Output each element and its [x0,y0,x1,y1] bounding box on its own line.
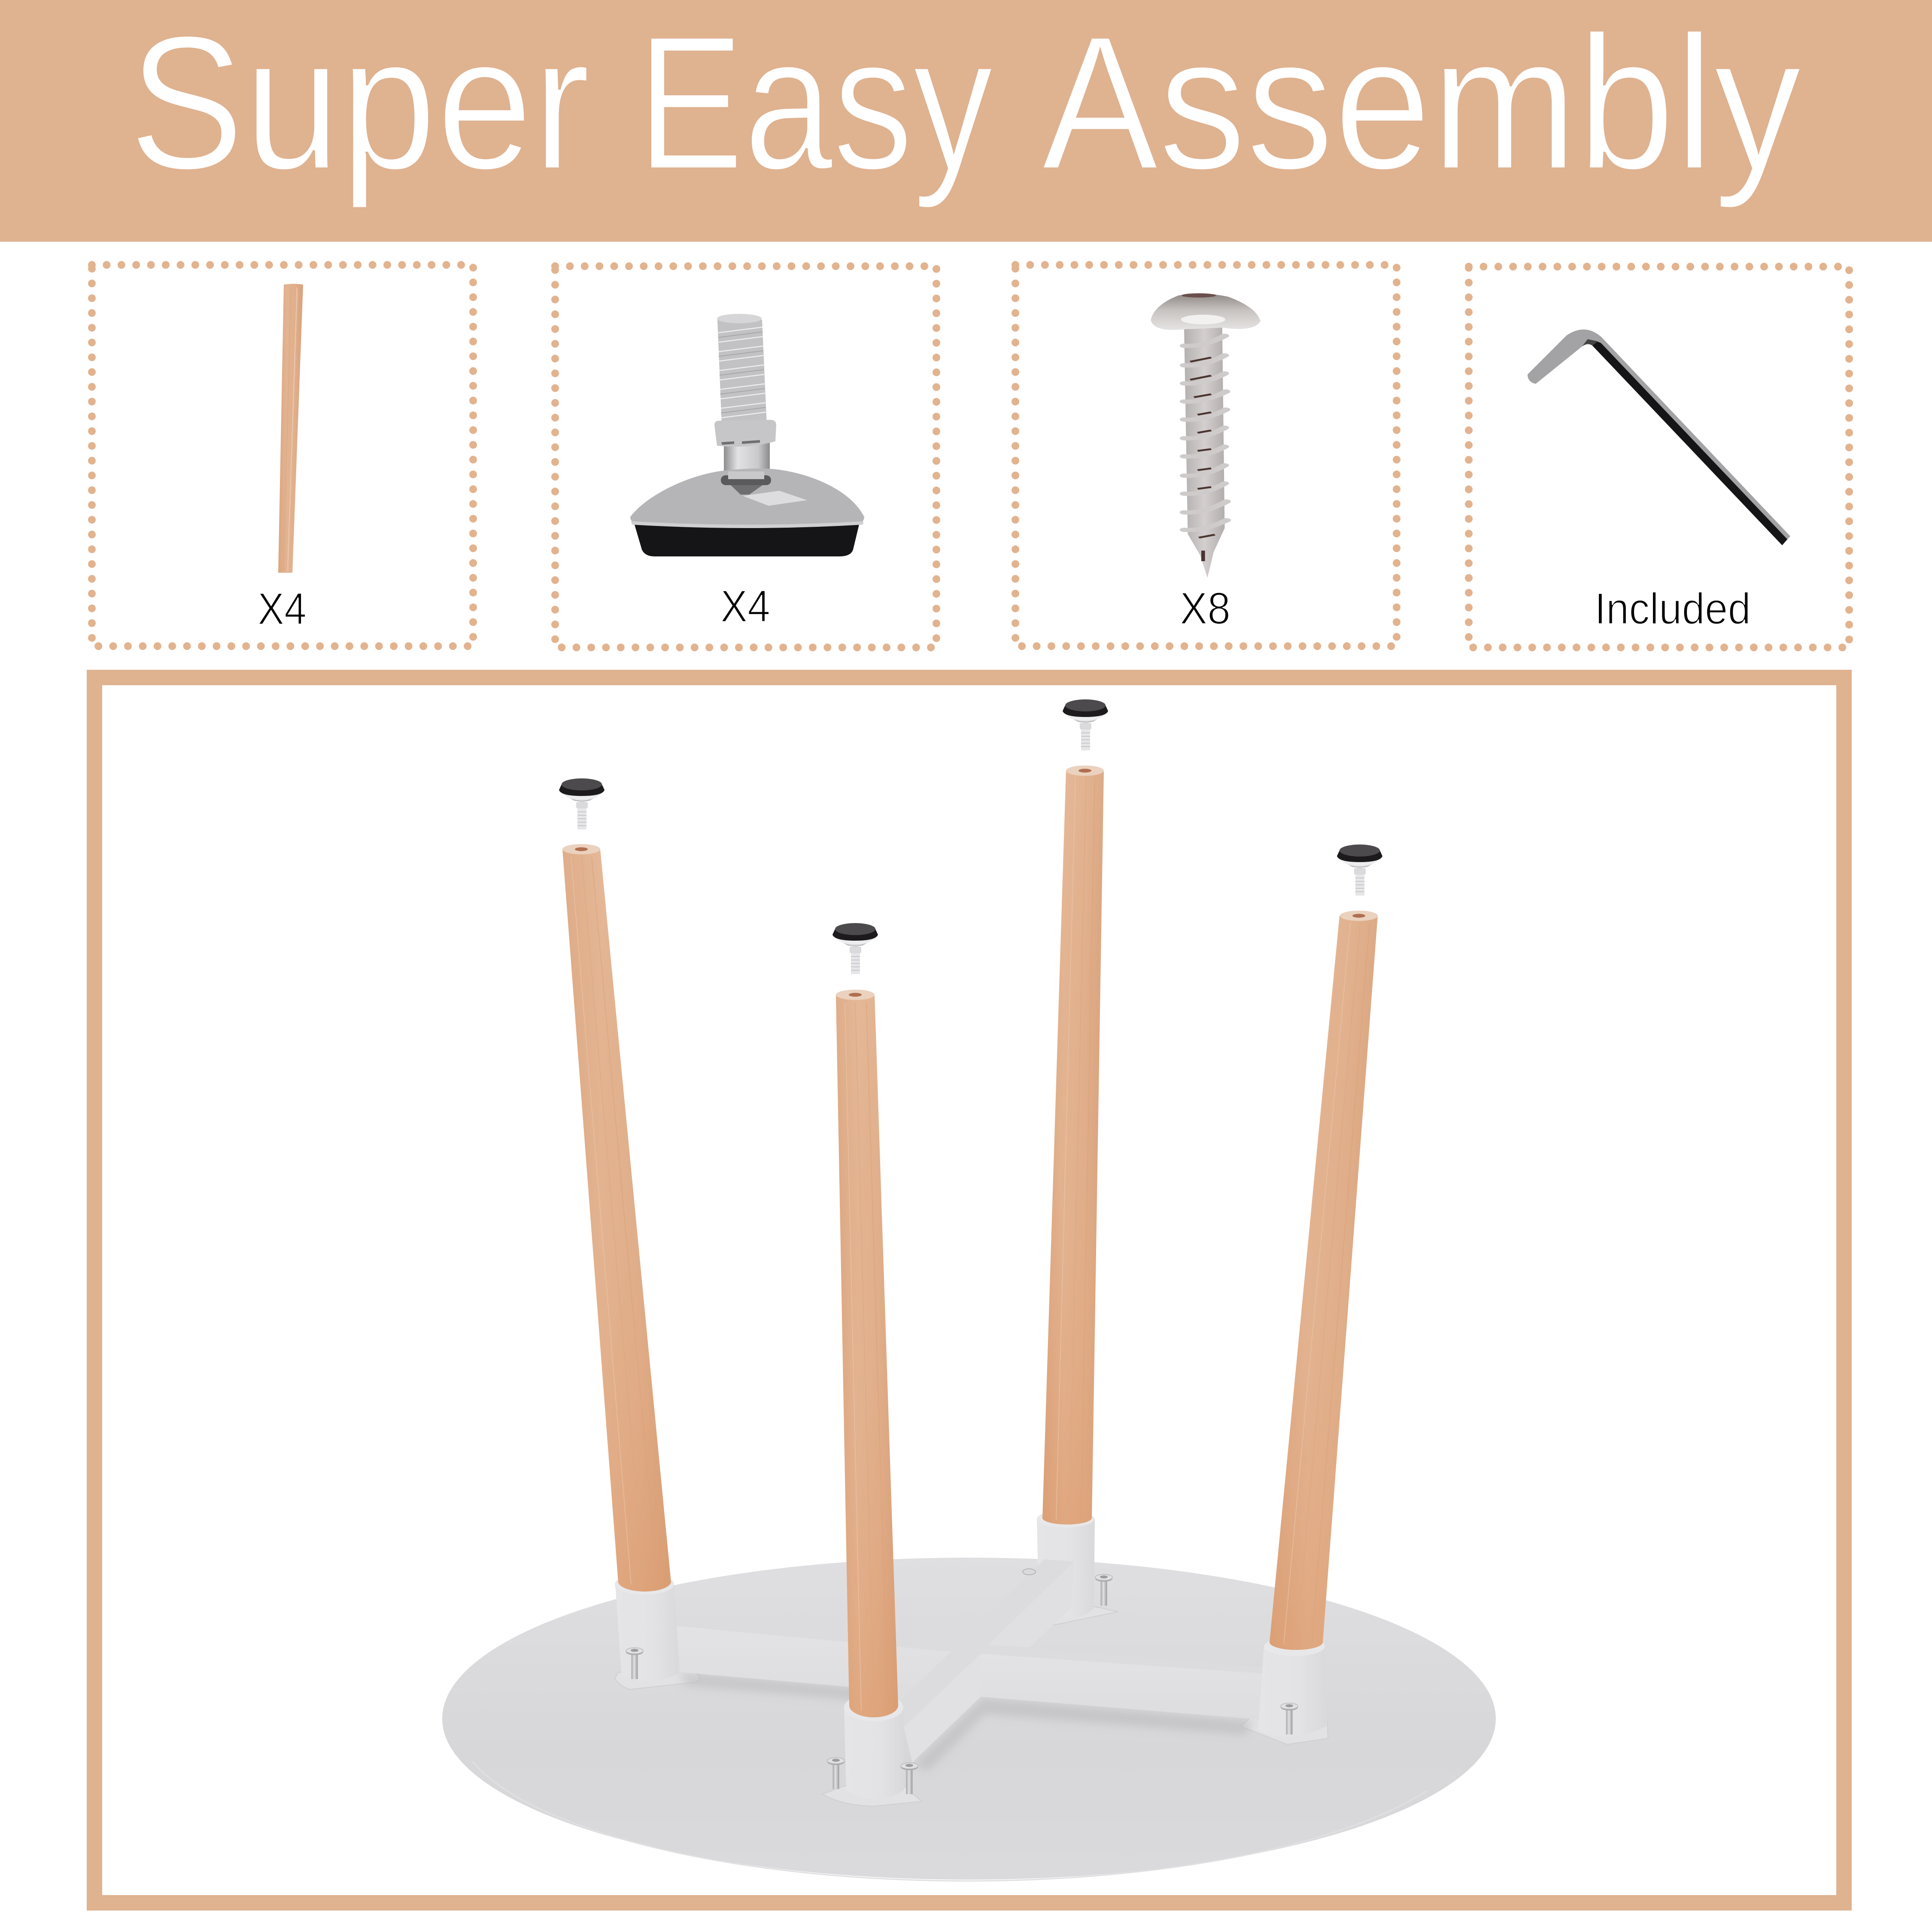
table top disk [442,1558,1496,1881]
panel: levelling foot part [555,266,936,647]
icon: hex key [1528,329,1790,545]
icon: levelling foot [630,314,864,556]
beam shadows [678,1672,1254,1771]
panel: screw part [1015,265,1397,646]
collar: right [1258,1637,1327,1737]
cross frame beams [665,1559,1270,1762]
panel: hex key part [1469,267,1849,647]
title: Easy [637,0,993,210]
table assembly illustration [442,699,1496,1881]
label: X4: X4 [258,584,307,634]
leg: back centre [1042,766,1104,1525]
collar: front centre [844,1694,904,1799]
panel: assembly frame [94,677,1844,1903]
icon: screw [1151,293,1261,578]
panel: leg part [92,265,473,646]
title: Assembly [1042,0,1801,210]
header banner [0,0,1932,242]
collar: left [615,1574,680,1681]
leg: left [562,844,671,1592]
leg: front centre [836,990,898,1717]
label: X4: X4 [720,581,770,632]
collar: back centre [1037,1510,1095,1618]
leg: right [1270,911,1378,1650]
bracket plates [615,1607,1328,1806]
feet with screws [559,699,1382,974]
icon: wooden leg [278,284,303,573]
label: X8: X8 [1180,583,1230,634]
label: Included: Included [1595,584,1751,633]
title: Super [129,0,590,210]
bracket bolts [626,1569,1298,1794]
